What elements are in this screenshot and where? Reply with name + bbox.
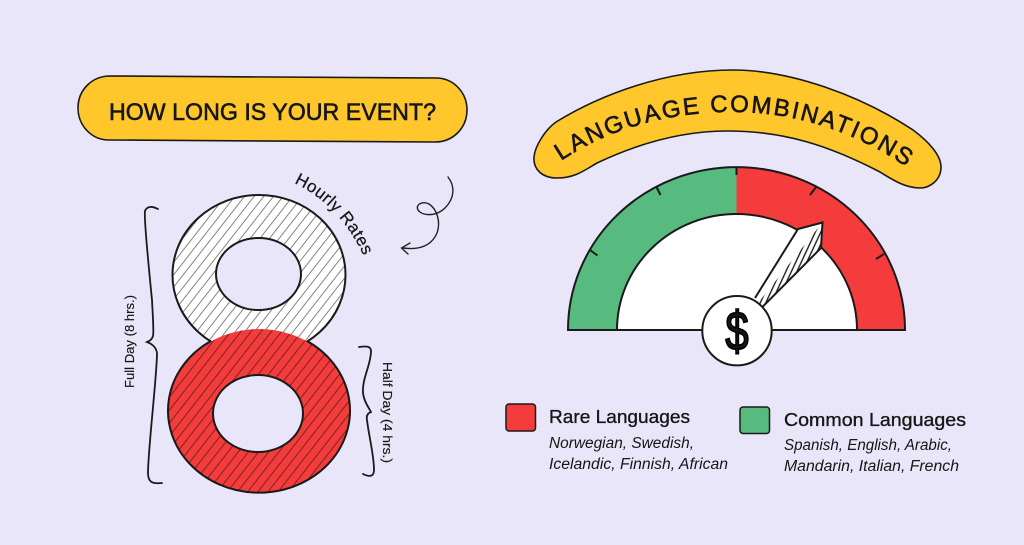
heading: how long is your event: HOW LONG IS YOUR EVENT? — [109, 99, 436, 126]
icon: dollar dial hub — [702, 296, 772, 365]
gauge rare zone — [736, 167, 905, 330]
panel: event length — [77, 75, 468, 494]
legend title: rare: Rare Languages — [549, 406, 690, 427]
legend text: rare list: Norwegian, Swedish, — [549, 435, 694, 452]
legend text: common list: Spanish, English, Arabic, — [784, 437, 952, 454]
brace: half day — [359, 346, 374, 476]
gauge outline — [568, 167, 905, 330]
brace: full day — [145, 207, 162, 483]
legend title: common: Common Languages — [784, 409, 966, 430]
legend text: rare list — [549, 435, 728, 473]
label: hourly rates: Hourly Rates — [295, 173, 371, 254]
heading: curved language combinations banner: LANGUAGE COMBINATIONS — [553, 95, 913, 164]
legend text: rare list: Icelandic, Finnish, African — [549, 456, 728, 473]
gauge inner dial — [617, 214, 857, 330]
heading: curved language combinations banner — [533, 69, 942, 189]
swatch: rare — [506, 404, 536, 431]
legend text: common list — [784, 437, 959, 475]
chart: figure eight upper ring — [172, 195, 346, 355]
label: half day: Half Day (4 hrs.) — [380, 362, 395, 463]
heading: how long is your event — [78, 76, 467, 142]
icon: dollar dial hub: $ — [725, 302, 749, 362]
arrow: curly arrow to hourly rates — [402, 177, 453, 254]
panel: language combinations — [505, 69, 966, 475]
chart: figure eight lower ring — [168, 329, 350, 493]
gauge common zone — [568, 167, 736, 330]
label: full day: Full Day (8 hrs.) — [122, 295, 137, 388]
chart: gauge — [568, 167, 905, 365]
legend: rare languages — [506, 404, 728, 473]
gauge tick marks — [590, 167, 884, 259]
gauge needle — [755, 222, 822, 307]
swatch: common — [740, 407, 770, 434]
legend: common languages — [740, 407, 966, 475]
legend text: common list: Mandarin, Italian, French — [784, 458, 959, 475]
